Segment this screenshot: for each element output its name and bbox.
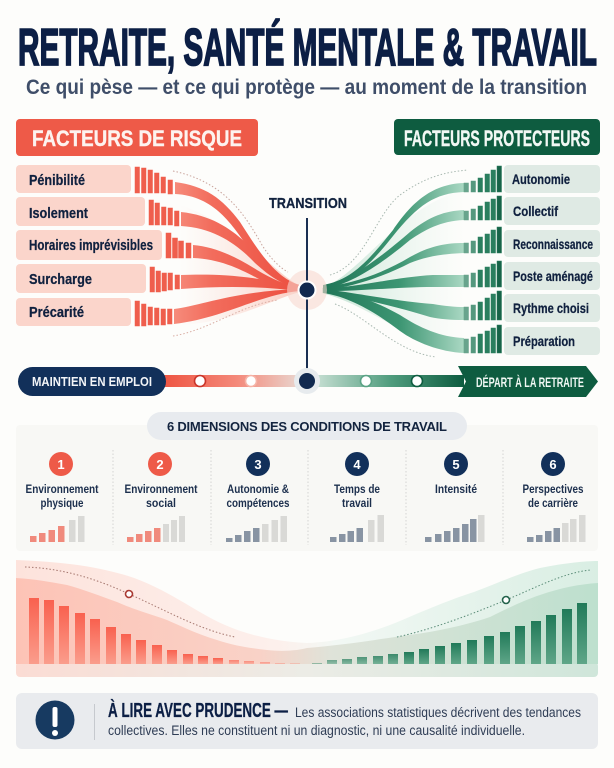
timeline: red track (160, 375, 300, 387)
dotted curve: upper protective envelope (330, 170, 468, 275)
dimension 6: 6 (549, 457, 557, 472)
label: Précarité (16, 298, 131, 326)
callout heading: À LIRE AVEC PRUDENCE — (108, 699, 288, 722)
flow: Préparation (323, 290, 464, 353)
dotted curve: lower risk envelope (173, 300, 278, 336)
panel: 6 dimensions (16, 412, 598, 551)
flow: Surcharge (181, 275, 300, 291)
label: Collectif (504, 197, 600, 225)
heading: risk factors: FACTEURS DE RISQUE (32, 126, 242, 151)
chart: green dotted trend (397, 570, 591, 637)
flow: Collectif (323, 210, 464, 289)
label: Préparation (504, 327, 600, 355)
dimension 5: Intensité (435, 482, 477, 496)
dimension 1: 1 (57, 457, 65, 472)
chart: risk and protection curves (16, 560, 598, 677)
timeline: green track (318, 375, 464, 387)
flow: Rythme choisi (323, 289, 464, 320)
dimension 2: Environnement (124, 482, 198, 496)
heading: risk factors (16, 119, 258, 156)
dimension 1 (26, 452, 98, 542)
dotted curve: upper risk envelope (173, 171, 288, 272)
dimension 1: physique (40, 496, 84, 510)
label: Poste aménagé: Poste aménagé (513, 268, 593, 284)
chart: red dotted trend (25, 567, 235, 637)
callout body line 1: Les associations statistiques décrivent des tendances (295, 705, 581, 720)
flow: Isolement (181, 212, 300, 289)
dimension 2: 2 (156, 457, 164, 472)
dimension 3: 3 (254, 457, 262, 472)
dimension 3: Autonomie & (227, 482, 289, 496)
chart: red marker (126, 590, 132, 598)
risk bar clusters (135, 167, 191, 326)
dimensions heading: 6 DIMENSIONS DES CONDITIONS DE TRAVAIL (167, 419, 447, 434)
heading: protective factors (394, 119, 600, 155)
dimension 4: travail (342, 496, 372, 510)
pill: maintien en emploi (18, 367, 166, 396)
pill: maintien en emploi: MAINTIEN EN EMPLOI (32, 374, 152, 389)
dimensions heading (147, 412, 467, 440)
dimension 5: 5 (452, 457, 460, 472)
label: Précarité: Précarité (29, 304, 84, 321)
label: Rythme choisi (504, 294, 600, 322)
label: Autonomie: Autonomie (512, 171, 570, 187)
callout body line 2: collectives. Elles ne constituent ni un diagnostic, ni une causalité individuelle. (108, 723, 525, 738)
dimension 2 (124, 452, 198, 542)
transition label: TRANSITION (269, 196, 347, 212)
label: Préparation: Préparation (513, 333, 575, 349)
panel: protective flows (322, 170, 468, 357)
timeline nodes (194, 376, 422, 386)
chart base strip (16, 662, 598, 677)
chart: red bars (29, 598, 300, 664)
junction node (298, 282, 316, 298)
dimension 4: 4 (353, 457, 361, 472)
chart: light area (16, 560, 598, 664)
chart: dark area (16, 578, 598, 664)
flow: Poste aménagé (323, 275, 464, 291)
label: Surcharge (16, 264, 146, 293)
center node (294, 368, 320, 394)
label: Horaires imprévisibles (16, 230, 162, 260)
flow: Reconnaissance (323, 243, 464, 290)
flow: Autonomie (323, 183, 464, 288)
dimension 2: social (146, 496, 176, 510)
label: Pénibilité: Pénibilité (29, 172, 85, 189)
label: Isolement (16, 197, 145, 226)
dimension 4: Temps de (334, 482, 380, 496)
dimension 6 (522, 452, 586, 542)
label: Reconnaissance (504, 230, 600, 257)
label: Collectif: Collectif (513, 203, 558, 219)
dimension 1: Environnement (26, 482, 98, 496)
chart: green bars (312, 603, 587, 664)
dimension 6: Perspectives (522, 482, 584, 496)
protective bar clusters (464, 166, 502, 353)
flow: Précarité (174, 289, 300, 324)
label: Isolement: Isolement (29, 205, 88, 222)
dimension 5 (425, 452, 484, 542)
risk labels (16, 165, 162, 326)
dimension 3: compétences (226, 496, 290, 510)
icon: exclamation mark (36, 700, 74, 740)
dimension 6: de carrière (528, 496, 578, 510)
label: Rythme choisi: Rythme choisi (513, 300, 589, 316)
label: Surcharge: Surcharge (29, 271, 92, 288)
label: Poste aménagé (504, 262, 600, 290)
transition axis (287, 218, 327, 381)
flow: Pénibilité (175, 182, 300, 288)
callout: caution (16, 693, 598, 749)
chart: green marker (502, 596, 510, 604)
flow: Horaires imprévisibles (193, 245, 300, 290)
dotted curve: lower protective envelope (335, 304, 436, 357)
label: Pénibilité (16, 165, 131, 193)
panel: risk flows (173, 171, 300, 336)
dimension 4 (330, 452, 384, 542)
dimension 3 (226, 452, 290, 542)
label: Horaires imprévisibles: Horaires imprévisibles (29, 237, 153, 254)
protective labels (504, 165, 600, 355)
label: Autonomie (504, 165, 600, 193)
arrow: départ à la retraite (458, 366, 598, 397)
timeline (18, 366, 598, 397)
